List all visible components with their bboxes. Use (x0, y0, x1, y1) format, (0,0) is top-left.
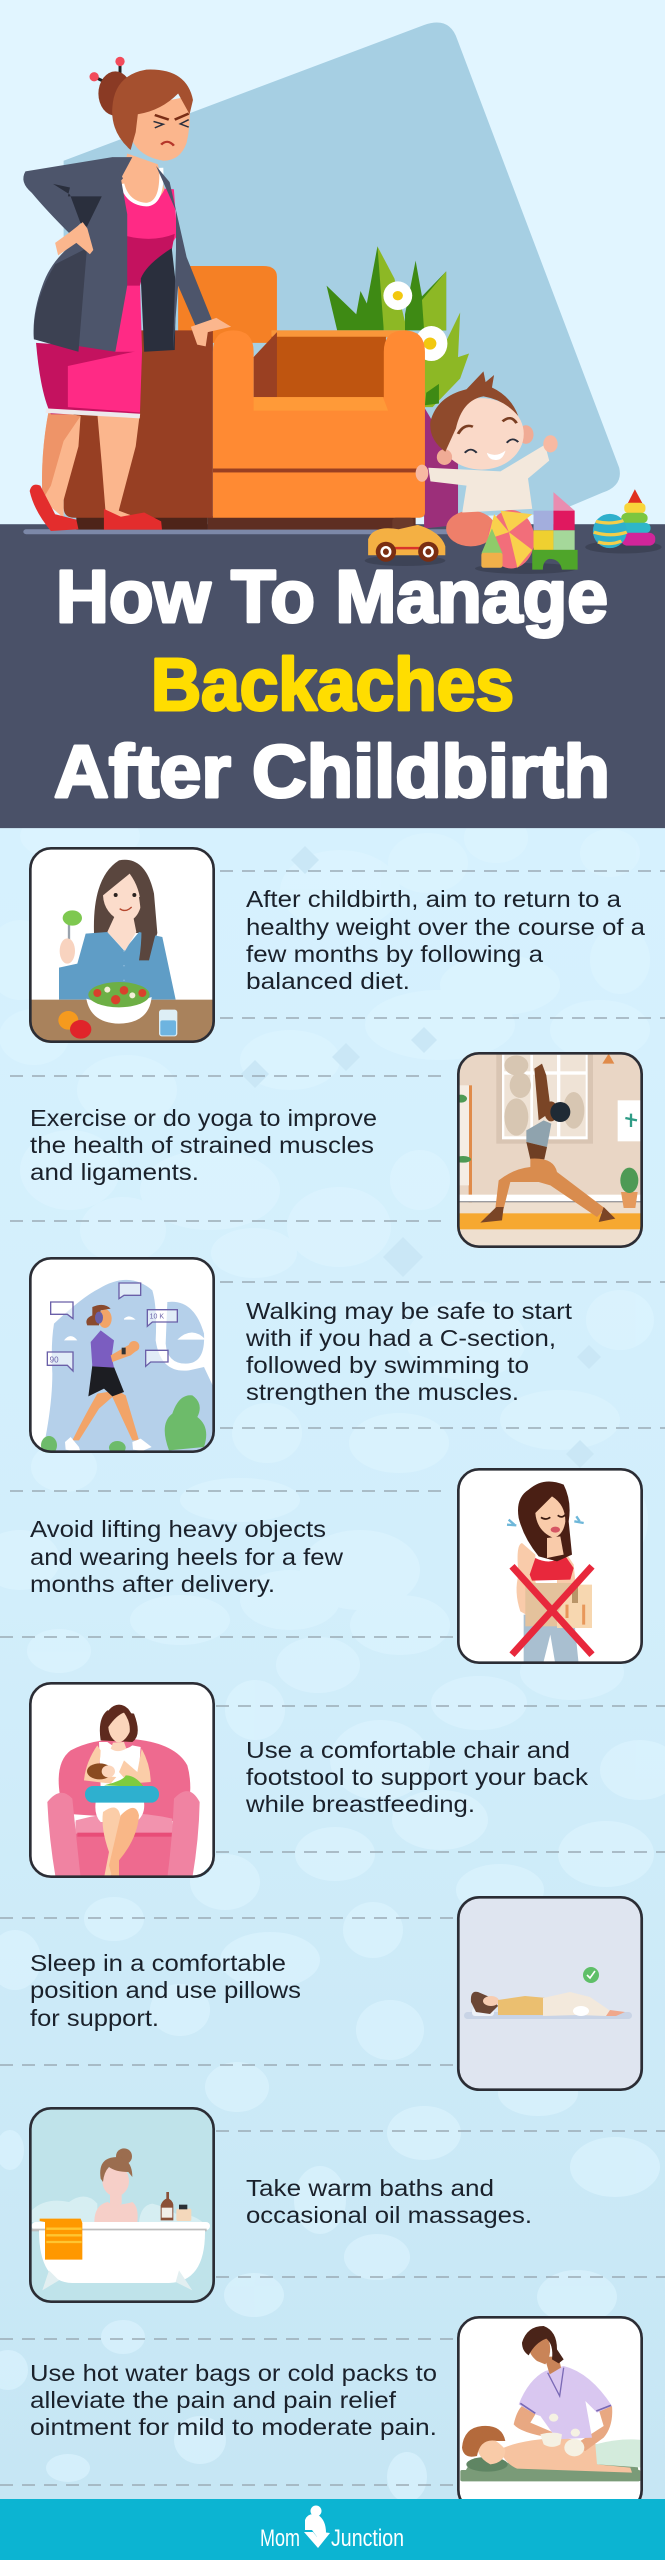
text: tip 3: with if you had a C-section, (245, 1325, 556, 1351)
text: tip 6 (30, 1950, 301, 2031)
card: woman doing yoga (455, 1052, 643, 1248)
card: breastfeeding in chair (29, 1682, 215, 1878)
card: avoid lifting heavy objects (457, 1468, 643, 1664)
text: tip 4: Avoid lifting heavy objects (30, 1516, 326, 1542)
logo: MomJunction: Junction (331, 2525, 404, 2552)
logo: MomJunction: Mom (260, 2525, 300, 2552)
text: tip 1: healthy weight over the course of a (246, 914, 645, 940)
logo: MomJunction (260, 2506, 404, 2552)
text: tip 2 (30, 1105, 377, 1185)
card: woman lying with pillow under knees (458, 1897, 642, 2090)
text: tip 1: few months by following a (246, 941, 543, 967)
text: tip 5 (245, 1737, 589, 1817)
text: tip 7: Take warm baths and (246, 2175, 494, 2201)
title (54, 555, 610, 813)
text: tip 6: Sleep in a comfortable (30, 1950, 286, 1976)
text: tip 7 (246, 2175, 532, 2228)
text: tip 1: After childbirth, aim to return to a (246, 886, 621, 912)
text: tip 8 (30, 2360, 437, 2440)
panel: hero background (0, 0, 665, 525)
text: tip 8: ointment for mild to moderate pain. (30, 2414, 437, 2440)
text: tip 3: strengthen the muscles. (246, 1379, 519, 1405)
floor highlight (23, 529, 452, 534)
footer band with logo (0, 2499, 665, 2560)
card: woman walking with fitness stats: 90 (50, 1355, 59, 1364)
row dividers (0, 871, 665, 2485)
text: tip 8: Use hot water bags or cold packs to (30, 2360, 437, 2386)
card: woman walking with fitness stats (29, 1257, 215, 1455)
card: massage with herbal compress (457, 2316, 643, 2512)
text: tip 2: Exercise or do yoga to improve (30, 1105, 377, 1131)
card: woman eating salad (29, 847, 215, 1043)
baby (416, 371, 558, 546)
panel: tips background pattern (0, 808, 665, 2502)
text: tip 1: balanced diet. (246, 968, 410, 994)
mother (23, 57, 231, 531)
illustration: mother, armchair, baby and toys (0, 57, 665, 828)
text: tip 6: position and use pillows (30, 1977, 301, 2003)
title: Backaches (151, 643, 514, 726)
text: tip 3: Walking may be safe to start (246, 1298, 573, 1324)
text: tip 4: months after delivery. (30, 1571, 275, 1597)
text: tip 5: Use a comfortable chair and (246, 1737, 570, 1763)
text: tip 3: followed by swimming to (246, 1352, 529, 1378)
text: tip 6: for support. (30, 2005, 159, 2031)
toys (365, 489, 662, 574)
card: woman walking with fitness stats: 10 K (150, 1313, 164, 1320)
text: tip 4 (30, 1516, 343, 1597)
title: How To Manage (56, 555, 608, 638)
text: tip 3 (245, 1298, 573, 1405)
text: tip 2: and ligaments. (30, 1159, 199, 1185)
text: tip 7: occasional oil massages. (246, 2202, 532, 2228)
text: tip 2: the health of strained muscles (30, 1132, 374, 1158)
floor band (0, 524, 665, 828)
card: warm bath (29, 2107, 215, 2303)
text: tip 5: while breastfeeding. (245, 1791, 475, 1817)
title: After Childbirth (54, 730, 610, 813)
plant (327, 246, 469, 529)
text: tip 4: and wearing heels for a few (30, 1544, 343, 1570)
text: tip 5: footstool to support your back (246, 1764, 589, 1790)
text: tip 8: alleviate the pain and pain relief (30, 2387, 397, 2413)
armchair (64, 266, 425, 530)
text: tip 1 (246, 886, 645, 994)
